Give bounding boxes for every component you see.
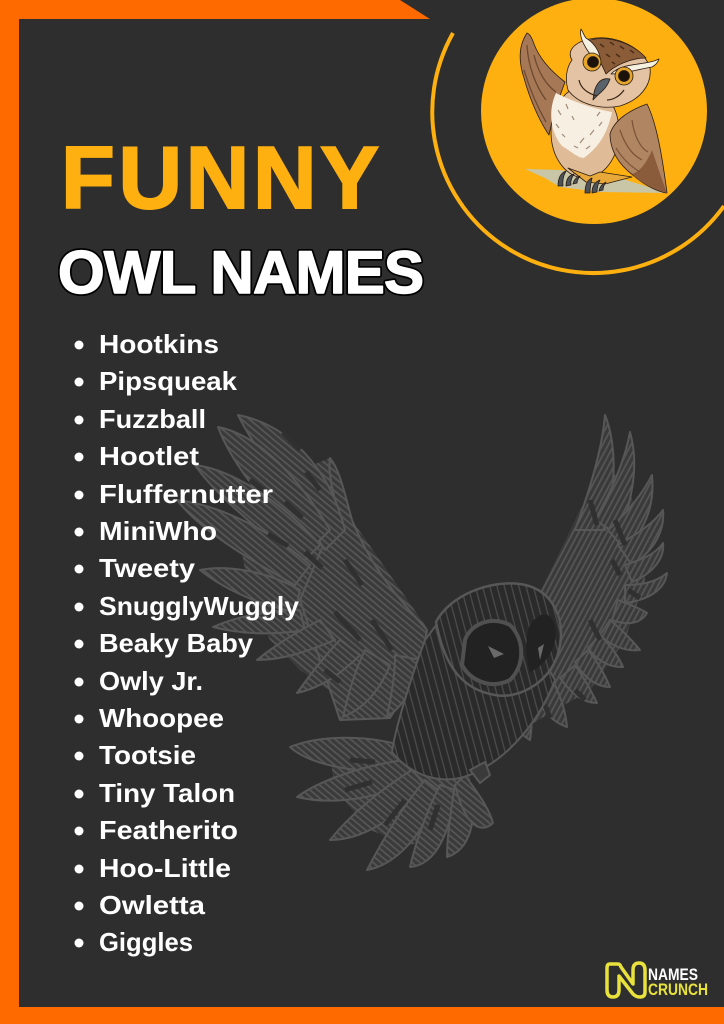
owl smile [579, 80, 624, 100]
name items: Whoopee [99, 703, 224, 733]
owl chest [551, 93, 612, 158]
owl eyes [583, 53, 601, 71]
eyes [488, 644, 544, 660]
owl raised wing feathers [524, 45, 556, 122]
tail [290, 738, 493, 870]
name items: Giggles [99, 927, 193, 957]
subtitle: OWL NAMES: OWL NAMES [58, 239, 424, 306]
name items: Fluffernutter [99, 479, 273, 509]
logo mark [607, 963, 645, 997]
logo text CRUNCH: CRUNCH [648, 980, 708, 999]
name items: Tootsie [99, 740, 196, 770]
name items: MiniWho [99, 516, 217, 546]
owl shadow [525, 169, 667, 193]
gold circle [481, 0, 707, 224]
subtitle: OWL NAMES: OWL NAMES [58, 239, 424, 306]
talon [470, 762, 490, 783]
wing silhouettes [240, 458, 645, 845]
bullets [74, 340, 84, 948]
logo text NAMES: NAMES [648, 965, 698, 984]
owl crown [585, 39, 646, 74]
name items: Hoo-Little [99, 853, 231, 883]
decorative ring arc [432, 33, 724, 273]
owl crown speckles [600, 42, 634, 64]
title: FUNNY: FUNNY [61, 128, 379, 227]
owl body [551, 86, 619, 178]
sketched flying owl watermark [177, 415, 667, 870]
logo: Names Crunch [607, 963, 708, 999]
owl raised wing [520, 33, 565, 135]
owl folded wing [610, 104, 667, 193]
right wing [505, 415, 667, 740]
name items: Beaky Baby [99, 628, 254, 658]
owl beak [593, 79, 610, 100]
name items: Featherito [99, 815, 238, 845]
body [392, 620, 555, 779]
list of names [74, 329, 300, 957]
face right side [526, 614, 556, 672]
name items: Owly Jr. [99, 666, 203, 696]
owl head [566, 38, 650, 107]
left wing [177, 415, 427, 720]
owl folded wing feathers [616, 120, 648, 172]
name items: Tiny Talon [99, 778, 235, 808]
owl chest marks [556, 104, 602, 149]
name items: Fuzzball [99, 404, 206, 434]
name items: SnugglyWuggly [99, 591, 300, 621]
owl brows [581, 29, 659, 74]
face [462, 621, 521, 684]
name items: Hootlet [99, 441, 199, 471]
name items [99, 329, 300, 957]
wing dark blotches [250, 432, 640, 830]
icon: cartoon owl [520, 29, 667, 193]
head [436, 583, 561, 696]
name items: Pipsqueak [99, 366, 238, 396]
owl feet [558, 168, 632, 193]
name items: Hootkins [99, 329, 219, 359]
name items: Tweety [99, 553, 196, 583]
name items: Owletta [99, 890, 206, 920]
